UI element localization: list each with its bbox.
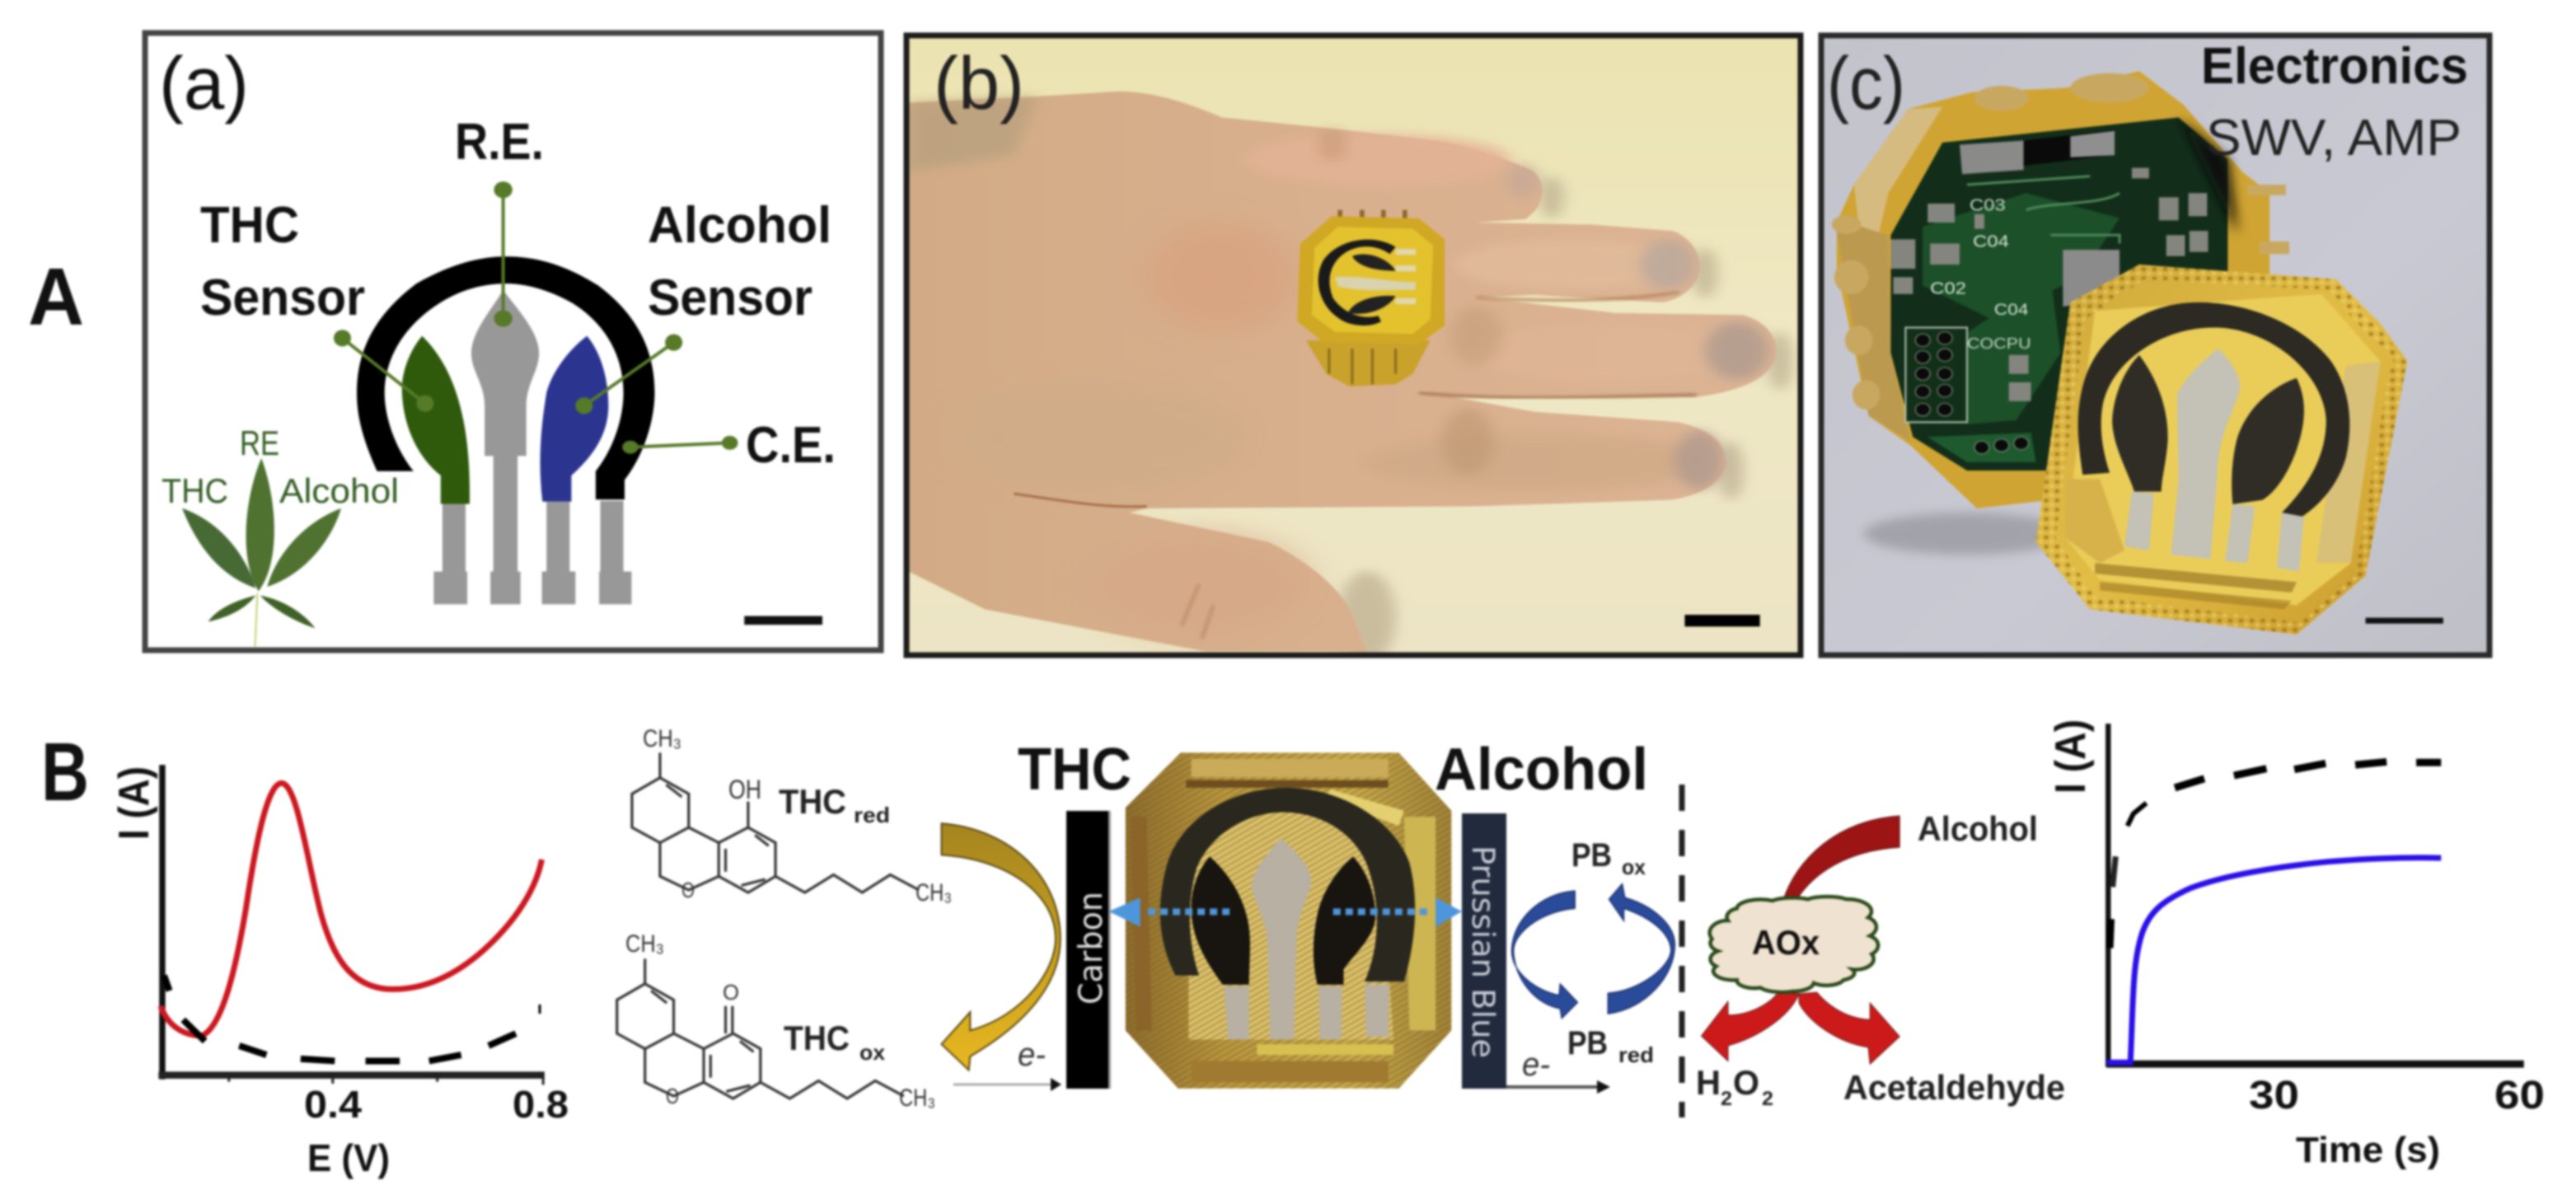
label THC red: red [854, 803, 890, 827]
arrow: electron flow left [953, 1078, 1061, 1091]
label Alcohol Sensor: Sensor [648, 269, 813, 326]
panel: (b) ring worn on hand photo [906, 35, 1801, 664]
circuit board: C04 [1973, 232, 2009, 251]
carbon electrode bar: Carbon [1073, 892, 1110, 1005]
right electrode [1314, 856, 1375, 985]
chemical structure: THC reduced: O [681, 878, 695, 902]
circuit board [1890, 117, 2237, 471]
electrode schematic [182, 181, 822, 647]
chart: chronoamperometry: 60 [2494, 1074, 2545, 1117]
heading THC: THC [1018, 737, 1131, 803]
label THC Sensor [200, 197, 365, 326]
chemical structure: THC oxidized: O [666, 1084, 679, 1108]
frame lumps [1832, 73, 2289, 410]
panel: (a) sensor schematic [145, 33, 881, 650]
label THC red [779, 782, 890, 827]
electron label left: e- [1018, 1037, 1046, 1073]
x axis title: Time (s) [2296, 1130, 2440, 1170]
dashed blank curve [2128, 761, 2441, 826]
chemical structure: THC oxidized: CH₃ [899, 1085, 935, 1112]
leaf labels: Alcohol [279, 471, 399, 510]
Prussian Blue electrode bar: Prussian Blue [1465, 846, 1501, 1058]
hand shadow [1337, 176, 1793, 664]
red sample curve [161, 783, 541, 1036]
connector lines [342, 190, 730, 447]
label SWV, AMP: SWV, AMP [2206, 110, 2461, 166]
counter electrode arc [357, 256, 654, 499]
y axis title: I (A) [110, 766, 158, 840]
label THC ox [784, 1019, 886, 1065]
label H2O2: H [1696, 1063, 1721, 1102]
circuit board: C04 [1994, 302, 2029, 319]
skin shading [909, 96, 1768, 639]
chart: chronoamperometry [2047, 719, 2545, 1170]
blue sample curve [2107, 858, 2441, 1062]
label Acetaldehyde: Acetaldehyde [1843, 1068, 2065, 1107]
label (b): (b) [934, 43, 1024, 125]
scale bar [744, 616, 822, 625]
heading Alcohol: Alcohol [1435, 737, 1648, 803]
arrow: alcohol to AOx [1783, 816, 1899, 901]
label R.E.: R.E. [455, 114, 544, 171]
scale bar [1684, 615, 1760, 626]
arrows: Prussian Blue redox cycle [1512, 884, 1674, 1019]
silver electrode and leads [1224, 838, 1389, 1040]
rear ring gold frame [1837, 71, 2269, 508]
dashed blank curve [164, 976, 540, 1061]
Prussian Blue electrode bar [1462, 813, 1506, 1089]
panel label B: B [41, 726, 89, 818]
label THC Sensor: Sensor [200, 269, 365, 326]
label THC red: THC [779, 782, 846, 821]
panel label A: A [28, 251, 84, 342]
panel border [1821, 35, 2489, 655]
dashed divider [1679, 785, 1684, 1117]
chemical structure: THC reduced: CH₃ [643, 725, 681, 752]
dotted arrow toward Prussian Blue [1333, 897, 1462, 926]
chemical structure: THC oxidized [617, 930, 935, 1112]
axes [158, 765, 545, 1085]
leaf labels: RE [240, 424, 279, 462]
chemical structure: THC reduced [632, 725, 952, 907]
gold frame [1126, 752, 1451, 1089]
label H2O2 [1696, 1063, 1773, 1110]
x axis title: E (V) [307, 1136, 390, 1179]
label Electronics: Electronics [2201, 38, 2468, 95]
label PB red: red [1618, 1042, 1654, 1067]
front ring with electrodes [2036, 265, 2407, 635]
enzyme cloud AOx [1710, 897, 1878, 992]
label C.E.: C.E. [746, 417, 836, 474]
ring on finger [1297, 210, 1445, 386]
chemical structure: THC oxidized: O [723, 980, 739, 1005]
label PB ox: PB [1571, 837, 1612, 874]
electron label right: e- [1522, 1047, 1550, 1083]
label H2O2: 2 [1721, 1088, 1732, 1110]
chemical structure: THC reduced: CH₃ [916, 879, 952, 907]
x tick labels: 30 [2249, 1074, 2299, 1117]
label Alcohol substrate: Alcohol [1918, 809, 2038, 848]
label THC Sensor: THC [200, 197, 299, 254]
left electrode [1192, 856, 1250, 985]
y axis title: I (A) [2047, 719, 2095, 794]
THC working electrode [402, 336, 470, 504]
circuit board: C03 [1969, 195, 2006, 214]
silver electrode and leads [2124, 349, 2304, 571]
reference electrode and leads [433, 290, 631, 604]
circuit board: COCPU [1967, 335, 2031, 353]
circuit board: C02 [1930, 279, 1966, 297]
cannabis leaf [182, 458, 341, 647]
label PB ox: ox [1622, 855, 1646, 879]
panel: (c) ring with electronics photo [1821, 35, 2489, 655]
axes [2105, 724, 2524, 1068]
chemical structure: THC reduced: OH [728, 775, 761, 804]
label THC ox: ox [859, 1040, 886, 1065]
leaf labels [162, 424, 399, 510]
scale bar [2366, 618, 2443, 624]
label Alcohol Sensor: Alcohol [648, 197, 831, 254]
label H2O2: 2 [1762, 1088, 1773, 1110]
chart: square wave voltammogram [110, 765, 569, 1179]
leaf labels: THC [162, 471, 228, 510]
x tick labels: 0.4 [304, 1083, 362, 1126]
ring shadow [1864, 513, 2070, 555]
panel border [906, 35, 1801, 655]
dark counter electrode [2078, 302, 2349, 517]
label PB red [1567, 1025, 1654, 1067]
chart: square wave voltammogram: 0.8 [513, 1083, 569, 1126]
alcohol working electrode [541, 336, 608, 502]
arrows: AOx products [1702, 992, 1899, 1064]
label PB red: PB [1567, 1025, 1608, 1061]
dotted arrow toward carbon [1108, 897, 1229, 926]
right dark electrode [2232, 378, 2304, 504]
label Alcohol Sensor [648, 197, 831, 326]
arrow: THC oxidation [941, 823, 1061, 1070]
label H2O2: O [1733, 1063, 1759, 1102]
counter electrode arc [1160, 788, 1415, 981]
label THC ox: THC [784, 1019, 850, 1057]
label PB ox [1571, 837, 1646, 879]
label (c): (c) [1827, 43, 1905, 125]
central ring sensor photo [1126, 752, 1451, 1089]
left dark electrode [2112, 355, 2168, 492]
chemical structure: THC oxidized: CH₃ [625, 930, 664, 958]
arrow: electron flow right [1506, 1080, 1610, 1094]
label (a): (a) [159, 43, 249, 125]
carbon electrode bar [1066, 811, 1111, 1089]
enzyme cloud AOx: AOx [1752, 923, 1820, 962]
hand [909, 91, 1776, 651]
